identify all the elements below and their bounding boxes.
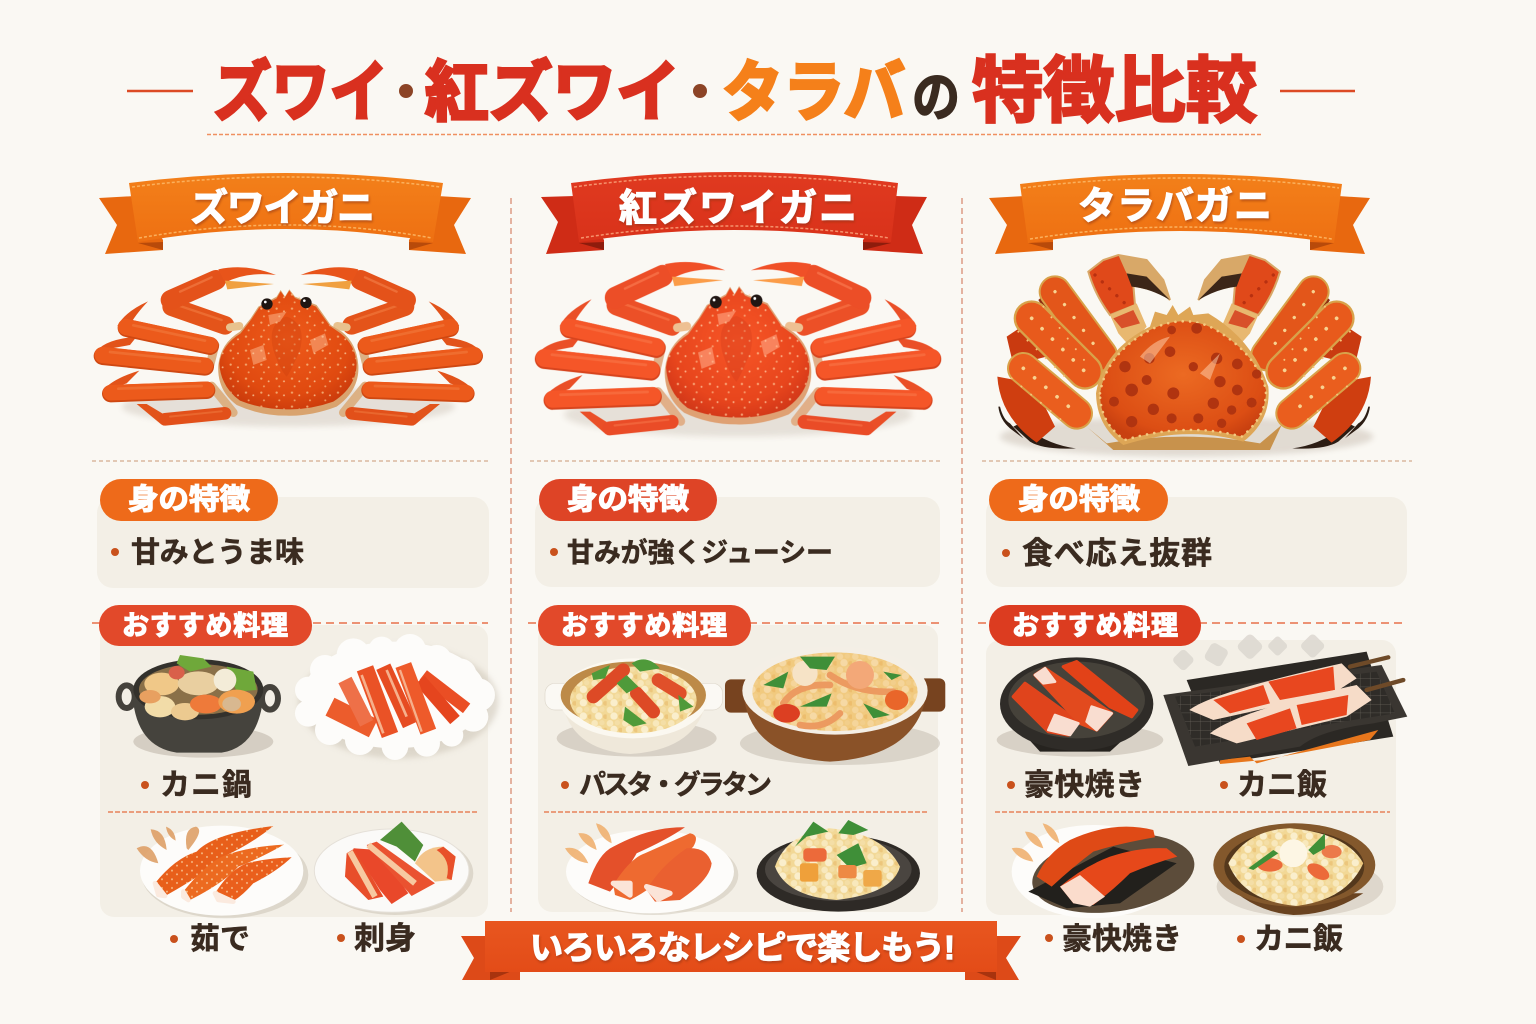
label: 刺身: 刺身 xyxy=(354,921,416,956)
pill: 身の特徴 xyxy=(989,479,1168,521)
pill: 身の特徴: 身の特徴 xyxy=(567,483,689,516)
dish: sashimi plate xyxy=(314,822,473,915)
dishes artwork xyxy=(997,633,1407,923)
column: ズワイガニ xyxy=(92,173,498,956)
column: 紅ズワイガニ xyxy=(528,172,945,915)
column dividers xyxy=(511,198,962,912)
crab illustration: king crab xyxy=(997,255,1373,457)
title: タラバ xyxy=(722,55,905,129)
dish: legs on leaf plate xyxy=(1012,823,1200,923)
title: 特徴比較 xyxy=(972,52,1257,132)
label: カニ飯 top: カニ飯 xyxy=(1237,769,1327,802)
dishes artwork xyxy=(545,647,945,915)
pill: おすすめ料理: おすすめ料理 xyxy=(561,611,727,641)
panel: recommended dishes xyxy=(528,605,945,915)
text: meat description: 食べ応え抜群 xyxy=(1022,536,1212,571)
ribbon: 紅ズワイガニ: 紅ズワイガニ xyxy=(619,187,857,230)
label: 豪快焼き bottom: 豪快焼き xyxy=(1062,923,1182,956)
ribbon: 紅ズワイガニ xyxy=(541,172,927,254)
dish: crab rice bowl xyxy=(1213,823,1383,917)
pill: おすすめ料理 xyxy=(99,605,312,646)
dish: grilled legs on dark plate xyxy=(997,657,1163,757)
label: 豪快焼き top: 豪快焼き xyxy=(1024,769,1145,802)
title: 紅ズワイ xyxy=(425,55,680,129)
ribbon: ズワイガニ xyxy=(99,173,471,254)
dish: crab claws plate xyxy=(565,823,738,915)
pill: 身の特徴: 身の特徴 xyxy=(1018,483,1140,516)
crab illustration: snow crab xyxy=(95,267,482,427)
title xyxy=(127,52,1355,134)
title: の xyxy=(912,68,960,128)
pill: 身の特徴: 身の特徴 xyxy=(128,483,250,516)
panel: recommended dishes xyxy=(978,605,1407,956)
pill: おすすめ料理: おすすめ料理 xyxy=(122,611,288,641)
dish: grilled legs on rack xyxy=(1163,652,1407,766)
dish: fried rice on black plate xyxy=(757,820,920,912)
crab illustration: red snow crab xyxy=(536,262,940,436)
panel: meat features xyxy=(535,479,940,587)
panel: meat features xyxy=(97,479,489,588)
ribbon: タラバガニ xyxy=(989,174,1370,254)
pill: 身の特徴 xyxy=(100,479,278,521)
dish: brown paella pan xyxy=(725,647,945,765)
dishes artwork xyxy=(119,634,498,918)
label: カニ飯 bottom: カニ飯 xyxy=(1254,923,1343,956)
ribbon: ズワイガニ: ズワイガニ xyxy=(190,187,375,230)
text: meat description: 甘みが強くジューシー xyxy=(567,537,833,568)
panel: recommended dishes xyxy=(92,605,498,956)
pill: おすすめ料理: おすすめ料理 xyxy=(1012,611,1178,641)
bottom banner: いろいろなレシピで楽しもう! xyxy=(530,929,955,966)
ribbon: タラバガニ: タラバガニ xyxy=(1078,186,1272,228)
dish: boiled crab legs xyxy=(137,826,308,918)
label: パスタ・グラタン: パスタ・グラタン xyxy=(579,769,772,800)
decoration: steam xyxy=(1172,633,1326,672)
bottom banner xyxy=(461,921,1021,980)
dish: crab hot pot xyxy=(119,655,278,758)
dish: white gratin xyxy=(545,658,723,757)
label: 茹で: 茹で xyxy=(190,923,250,956)
title: ズワイ xyxy=(213,55,388,129)
pill: おすすめ料理 xyxy=(538,605,751,646)
text: meat description: 甘みとうま味 xyxy=(131,536,304,569)
pill: 身の特徴 xyxy=(539,479,717,521)
dish: sashimi on white plate xyxy=(295,634,498,760)
column: タラバガニ xyxy=(978,174,1412,956)
pill: おすすめ料理 xyxy=(989,605,1201,646)
panel: meat features xyxy=(986,479,1407,587)
label: カニ鍋: カニ鍋 xyxy=(160,769,252,802)
